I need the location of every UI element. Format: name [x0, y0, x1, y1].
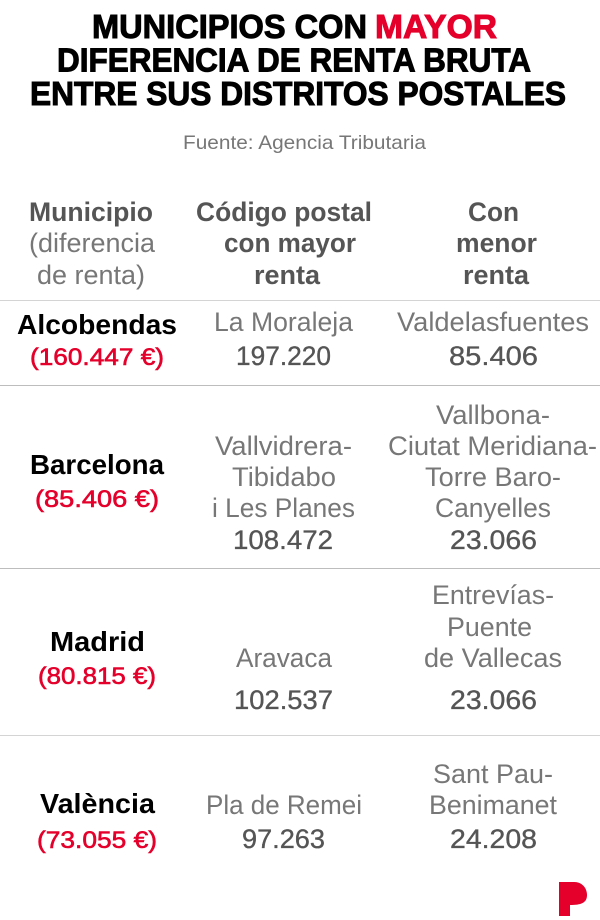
column header: municipio: (diferencia	[29, 228, 155, 258]
row: Barcelona	[30, 400, 597, 555]
column header: municipio: de renta)	[37, 260, 145, 290]
municipality: Barcelona	[30, 449, 164, 513]
lowest income: Vallbona-Ciutat Meridiana-Torre Baro-Canyelles: Ciutat Meridiana-	[388, 431, 597, 461]
row: Madrid	[38, 580, 562, 715]
highest income: Vallvidrera-Tibidabo i Les Planes	[212, 431, 355, 555]
lowest income: Sant Pau-Benimanet: Benimanet	[429, 790, 558, 820]
source note: Fuente: Agencia Tributaria	[183, 132, 426, 154]
lowest income: Vallbona-Ciutat Meridiana-Torre Baro-Canyelles: 23.066	[450, 525, 537, 555]
highest income: La Moraleja	[214, 307, 353, 371]
municipality: Barcelona: Barcelona	[30, 449, 164, 480]
highest income: La Moraleja: 197.220	[236, 341, 331, 371]
highest income: Aravaca: 102.537	[234, 685, 333, 715]
highest income: Vallvidrera-Tibidabo i Les Planes: Tibidabo	[232, 462, 336, 492]
column header: highest income postcode: Código postal	[196, 197, 372, 227]
municipality: València: (73.055 €)	[37, 827, 157, 854]
lowest income: Valdelasfuentes	[397, 307, 589, 371]
lowest income: Sant Pau-Benimanet: 24.208	[450, 824, 537, 854]
column header: lowest income postcode	[456, 197, 537, 290]
lowest income: Entrevías-Puente de Vallecas: Entrevías-	[432, 580, 554, 610]
column header: municipio: Municipio	[29, 197, 153, 227]
lowest income: Entrevías-Puente de Vallecas: Puente	[447, 612, 532, 642]
title	[30, 8, 566, 112]
lowest income: Sant Pau-Benimanet	[429, 759, 558, 854]
row: València	[37, 759, 558, 854]
title: MAYOR	[375, 8, 497, 45]
column header: municipio	[29, 197, 155, 290]
column header: highest income postcode	[196, 197, 372, 290]
title: ENTRE SUS DISTRITOS POSTALES	[30, 75, 566, 112]
lowest income: Sant Pau-Benimanet: Sant Pau-	[433, 759, 553, 789]
municipality: Alcobendas: Alcobendas	[17, 309, 177, 340]
column header: highest income postcode: renta	[254, 260, 320, 290]
lowest income: Vallbona-Ciutat Meridiana-Torre Baro-Canyelles	[388, 400, 597, 555]
column header: lowest income postcode: menor	[456, 228, 537, 258]
lowest income: Valdelasfuentes: 85.406	[449, 341, 538, 371]
highest income: Vallvidrera-Tibidabo i Les Planes: Vallvidrera-	[215, 431, 352, 461]
title: DIFERENCIA DE RENTA BRUTA	[57, 42, 531, 78]
highest income: Aravaca	[234, 643, 333, 715]
icon: red P logo	[559, 882, 587, 916]
highest income: Pla de Remei	[206, 790, 362, 854]
title: MUNICIPIOS CON	[92, 8, 367, 45]
highest income: Aravaca: Aravaca	[236, 643, 332, 673]
municipality: València	[37, 788, 157, 854]
municipality: Alcobendas: (160.447 €)	[30, 344, 164, 371]
lowest income: Entrevías-Puente de Vallecas: de Vallecas	[424, 643, 562, 673]
column header: lowest income postcode: Con	[468, 197, 519, 227]
highest income: Vallvidrera-Tibidabo i Les Planes: i Les Planes	[212, 493, 355, 523]
lowest income: Entrevías-Puente de Vallecas: 23.066	[450, 685, 537, 715]
lowest income: Vallbona-Ciutat Meridiana-Torre Baro-Canyelles: Vallbona-	[436, 400, 550, 430]
municipality: València: València	[40, 788, 155, 819]
lowest income: Vallbona-Ciutat Meridiana-Torre Baro-Canyelles: Torre Baro-	[425, 462, 561, 492]
highest income: Vallvidrera-Tibidabo i Les Planes: 108.472	[233, 525, 333, 555]
column header: lowest income postcode: renta	[463, 260, 529, 290]
column header: highest income postcode: con mayor	[224, 228, 356, 258]
row: Alcobendas	[17, 307, 589, 371]
municipality: Madrid: (80.815 €)	[38, 663, 156, 690]
municipality: Barcelona: (85.406 €)	[35, 486, 159, 513]
municipality: Madrid: Madrid	[50, 626, 145, 657]
highest income: Pla de Remei: 97.263	[242, 824, 325, 854]
municipality: Alcobendas	[17, 309, 177, 371]
lowest income: Valdelasfuentes: Valdelasfuentes	[397, 307, 589, 337]
highest income: La Moraleja: La Moraleja	[214, 307, 353, 337]
lowest income: Entrevías-Puente de Vallecas	[424, 580, 562, 715]
municipality: Madrid	[38, 626, 156, 690]
lowest income: Vallbona-Ciutat Meridiana-Torre Baro-Canyelles: Canyelles	[435, 493, 551, 523]
highest income: Pla de Remei: Pla de Remei	[206, 790, 362, 820]
